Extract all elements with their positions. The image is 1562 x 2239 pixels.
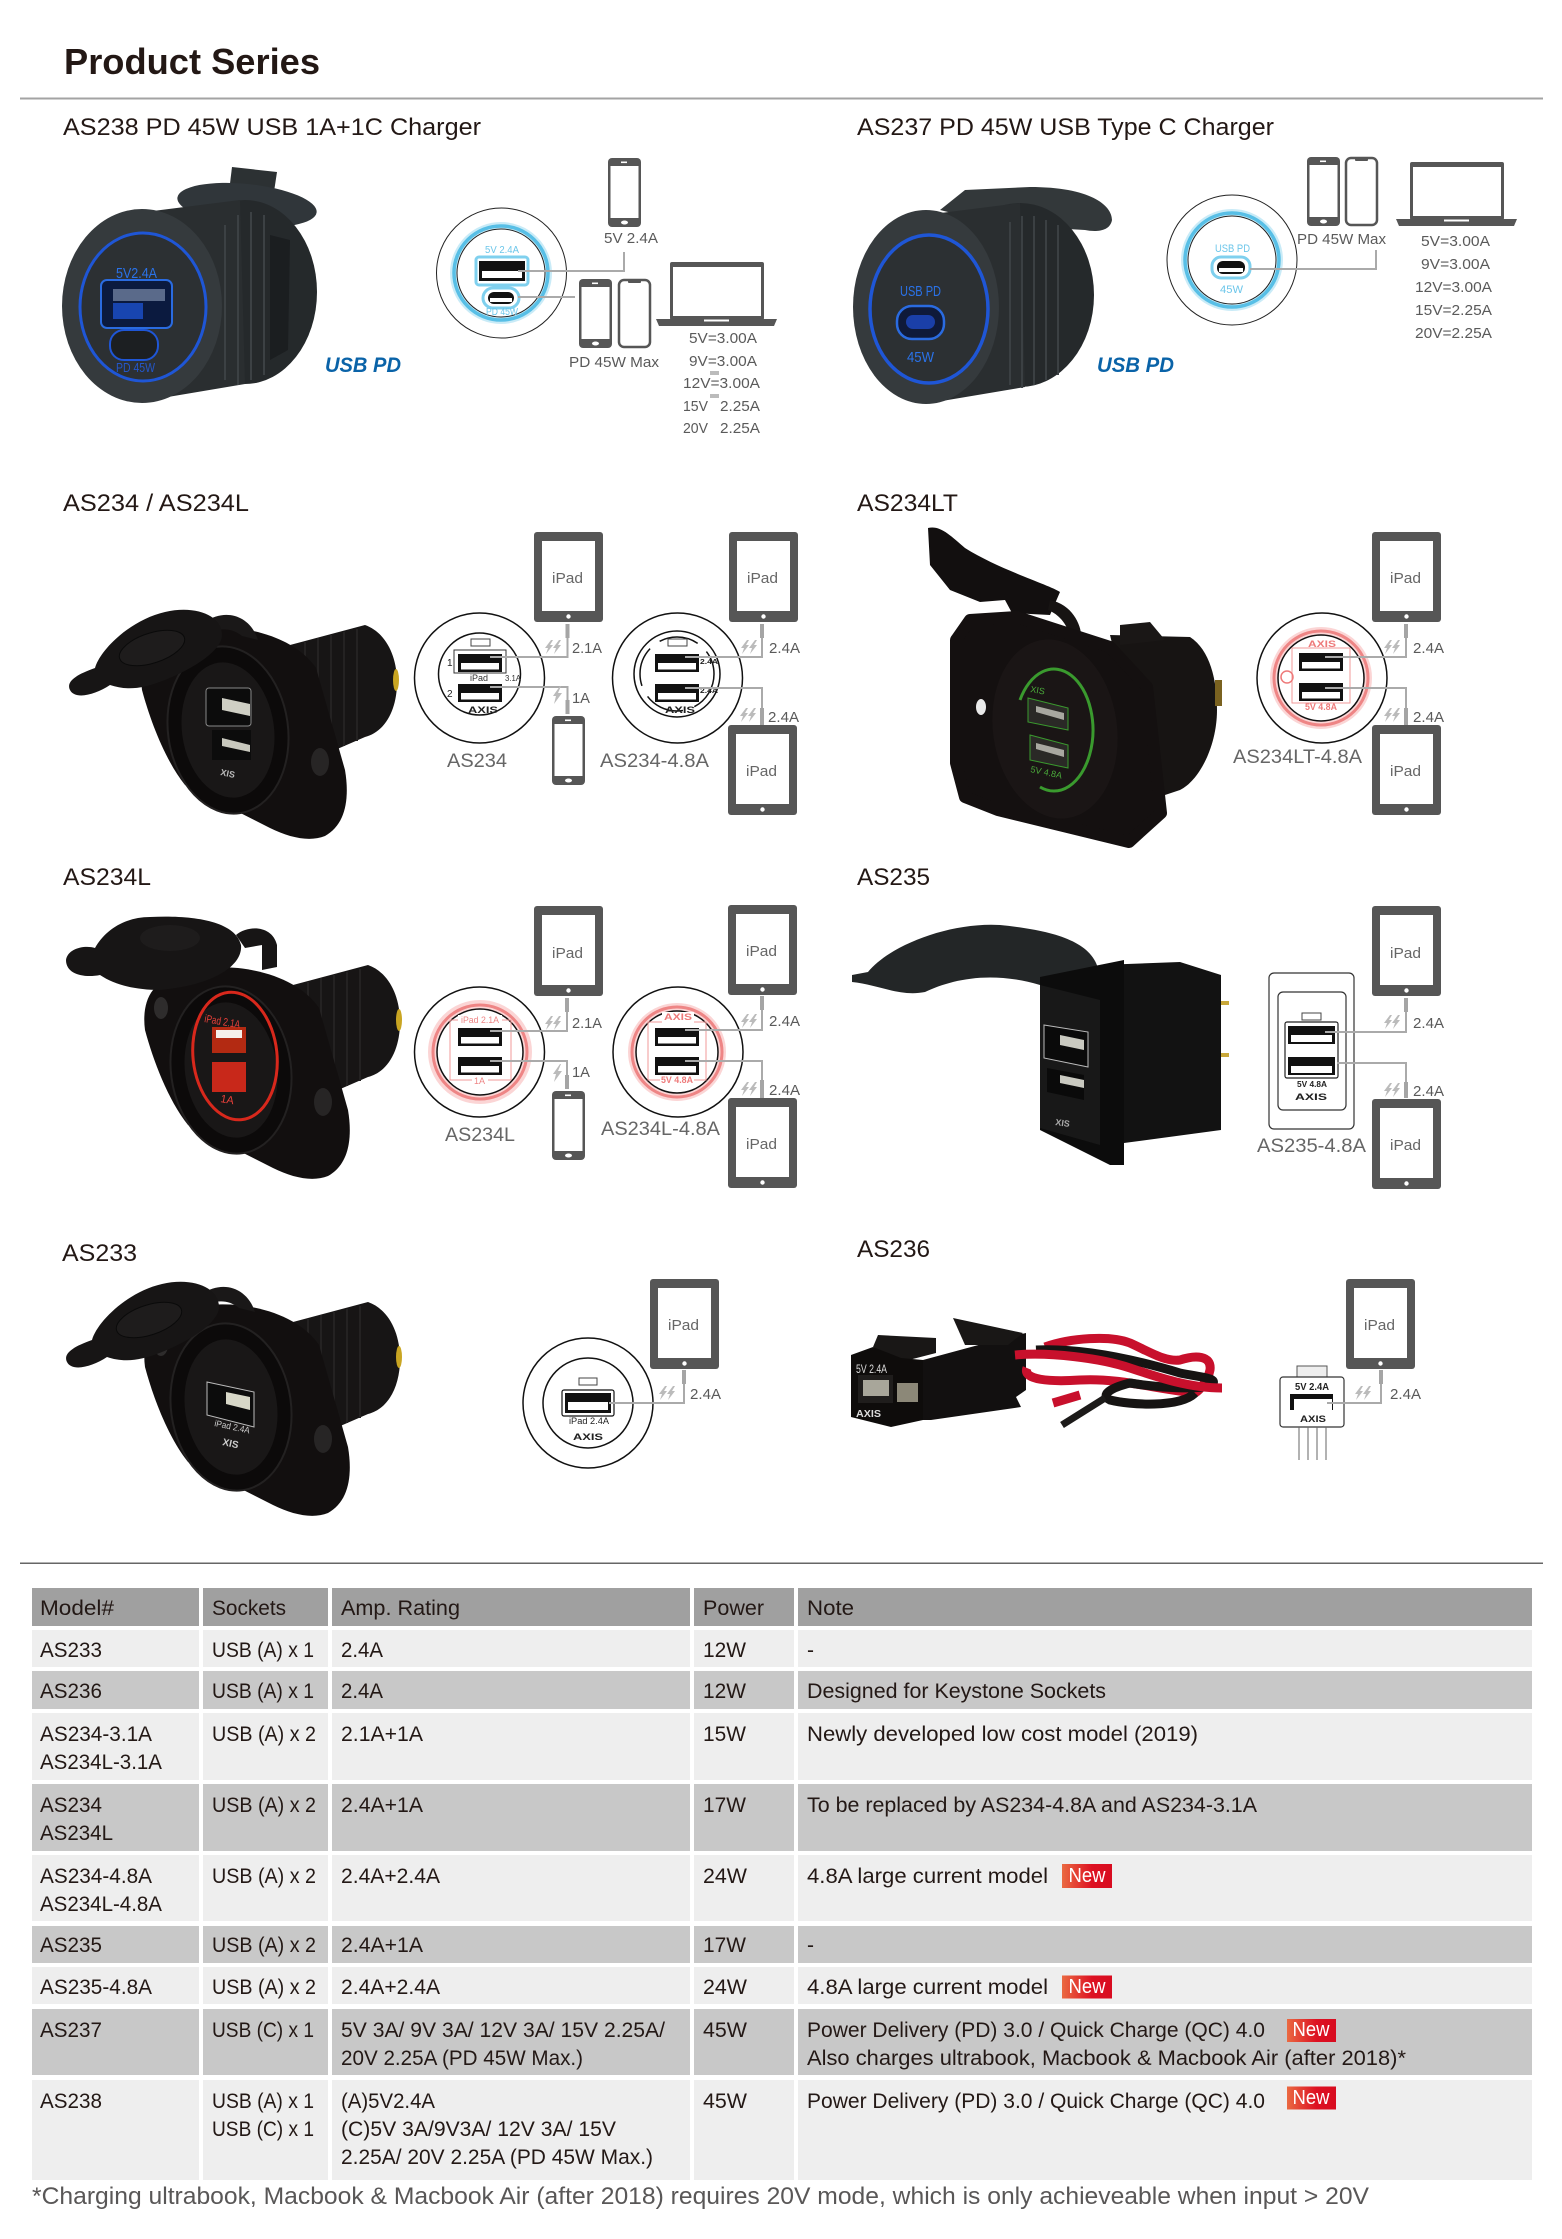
diagram: AS234 socket: 2	[447, 689, 453, 700]
table header	[32, 1588, 1532, 1626]
voltage list: 12V=3.00A	[683, 375, 760, 392]
label: 2.4A: 2.4A	[768, 709, 799, 726]
icon: iPad top	[1372, 906, 1441, 996]
photo: AS234L charger: iPad 2.1A	[203, 1013, 242, 1031]
row: AS236: Designed for Keystone Sockets	[807, 1680, 1106, 1703]
icon: iPad	[650, 1279, 719, 1369]
row: AS235: USB (A) x 2	[212, 1934, 316, 1957]
icon: iPad top	[728, 905, 797, 995]
specification table	[32, 1588, 1532, 2180]
label: iPad: iPad	[746, 943, 777, 960]
row: AS234: AS234	[40, 1794, 102, 1817]
row: AS235-4.8A	[32, 1967, 1532, 2004]
panel: AS236	[851, 1236, 1421, 1460]
row: AS236: AS236	[40, 1680, 102, 1703]
row: AS233: -	[807, 1639, 814, 1662]
diagram: AS236 module: AXIS	[1300, 1414, 1326, 1424]
panel: AS234L	[63, 864, 800, 1188]
icon: phone	[552, 716, 585, 785]
photo: AS238 charger	[62, 167, 319, 403]
row: AS234-3.1A: Newly developed low cost model (2019)	[807, 1723, 1198, 1746]
row: AS235: 17W	[703, 1934, 746, 1957]
icon: charge bolts	[659, 1386, 675, 1400]
label: 5V 2.4A: 5V 2.4A	[604, 230, 658, 247]
row: AS234-3.1A: 15W	[703, 1723, 746, 1746]
icon: laptop	[656, 262, 777, 326]
row: AS234: 17W	[703, 1794, 746, 1817]
row: AS236: 12W	[703, 1680, 746, 1703]
label: iPad: iPad	[746, 763, 777, 780]
row: AS237: Also charges ultrabook, Macbook & Macbook Air (after 2018)*	[807, 2047, 1406, 2070]
diagram: AS234 socket: 1	[447, 658, 453, 669]
diagram: AS234 socket: AXIS	[468, 705, 498, 715]
label: PD 45W Max: PD 45W Max	[1297, 231, 1386, 248]
label: iPad: iPad	[746, 1136, 777, 1153]
diagram: AS234L-4.8A socket: 5V 4.8A	[661, 1075, 693, 1085]
label: AS235-4.8A: AS235-4.8A	[1257, 1136, 1366, 1157]
photo: AS237 charger	[853, 187, 1112, 404]
row: AS233: AS233	[40, 1639, 102, 1662]
voltage list: 5V=3.00A	[689, 330, 757, 347]
diagram: AS236 module	[1280, 1366, 1381, 1460]
diagram: AS234L socket: iPad 2.1A	[461, 1015, 499, 1025]
label: AS234L: AS234L	[445, 1125, 515, 1146]
row: AS237	[32, 2009, 1532, 2075]
heading: AS234LT: AS234LT	[857, 490, 958, 517]
diagram: AS234L-4.8A socket: AXIS	[664, 1012, 692, 1022]
table header: Power	[703, 1597, 764, 1620]
row: AS234: USB (A) x 2	[212, 1794, 316, 1817]
row: AS233	[32, 1630, 1532, 1667]
row: AS234-3.1A: AS234-3.1A	[40, 1723, 152, 1746]
label: iPad: iPad	[1364, 1317, 1395, 1334]
label: iPad: iPad	[552, 570, 583, 587]
diagram: AS237 socket	[1167, 195, 1376, 325]
label: iPad: iPad	[668, 1317, 699, 1334]
badge: New: New	[1068, 1865, 1106, 1887]
photo: AS235 charger	[852, 925, 1229, 1165]
photo: AS234 charger	[69, 610, 399, 839]
voltage list	[1415, 233, 1492, 342]
diagram: AS235-4.8A socket: 5V 4.8A	[1297, 1080, 1327, 1089]
photo: AS236 charger	[851, 1318, 1222, 1427]
row: AS238: 2.25A/ 20V 2.25A (PD 45W Max.)	[341, 2146, 653, 2169]
panel: AS238	[62, 114, 777, 437]
diagram: AS233 socket: iPad 2.4A	[569, 1416, 609, 1426]
icon: charge bolts	[1384, 708, 1400, 722]
row: AS234-3.1A: 2.1A+1A	[341, 1723, 423, 1746]
row: AS234-4.8A: USB (A) x 2	[212, 1865, 316, 1888]
label: 2.1A: 2.1A	[572, 640, 602, 657]
row: AS234: AS234L	[40, 1822, 113, 1845]
diagram: AS234-4.8A socket: AXIS	[665, 705, 695, 715]
row: AS234-4.8A: 4.8A large current model	[807, 1865, 1048, 1888]
title: Product Series	[64, 41, 320, 82]
voltage list: 5V=3.00A	[1421, 233, 1490, 250]
icon: phone 5V	[608, 158, 641, 227]
diagram: AS234LT-4.8A socket	[1257, 613, 1406, 743]
icons: PD phones	[579, 279, 650, 348]
voltage list: 15V	[683, 398, 708, 415]
voltage list: 20V	[683, 420, 708, 437]
row: AS237: USB (C) x 1	[212, 2019, 314, 2042]
row: AS234-3.1A: AS234L-3.1A	[40, 1751, 162, 1774]
icon: charge bolts	[741, 1082, 757, 1096]
label: iPad: iPad	[1390, 1137, 1421, 1154]
icon: iPad bottom	[1372, 725, 1441, 815]
USB PD label: USB PD	[325, 354, 401, 377]
panel: AS233	[62, 1240, 721, 1516]
diagram: AS234-4.8A socket: 2.4A	[700, 688, 718, 695]
icon: iPad bottom	[1372, 1099, 1441, 1189]
diagram: AS238 socket: 5V 2.4A	[485, 245, 519, 256]
diagram: AS234LT-4.8A socket: AXIS	[1308, 639, 1336, 649]
label: AS234L-4.8A: AS234L-4.8A	[601, 1119, 720, 1140]
label: 2.4A: 2.4A	[769, 1013, 800, 1030]
photo: AS236 charger: AXIS	[856, 1409, 881, 1420]
icon: charge bolts	[1384, 640, 1400, 654]
row: AS237: 20V 2.25A (PD 45W Max.)	[341, 2047, 583, 2070]
voltage list: 2.25A	[720, 398, 760, 415]
row: AS238: (A)5V2.4A	[341, 2090, 435, 2113]
table header: Sockets	[212, 1597, 286, 1620]
label: 2.4A: 2.4A	[690, 1386, 721, 1403]
icon: charge bolts	[1384, 1083, 1400, 1097]
label: 1A: 1A	[572, 690, 590, 707]
row: AS237: 5V 3A/ 9V 3A/ 12V 3A/ 15V 2.25A/	[341, 2019, 665, 2042]
row: AS235-4.8A: USB (A) x 2	[212, 1976, 316, 1999]
table header: Model#	[40, 1597, 114, 1620]
label: iPad: iPad	[552, 945, 583, 962]
row: AS234-3.1A	[32, 1713, 1532, 1780]
label: iPad: iPad	[1390, 570, 1421, 587]
row: AS234-4.8A: 24W	[703, 1865, 747, 1888]
icon: charge bolts	[1355, 1386, 1371, 1400]
icon: iPad top	[729, 532, 798, 622]
row: AS238: 45W	[703, 2090, 747, 2113]
diagram: AS234L socket: 1A	[474, 1076, 485, 1086]
diagram: AS234-4.8A socket	[612, 613, 762, 743]
panel: AS235	[852, 864, 1444, 1189]
label: AS234LT-4.8A: AS234LT-4.8A	[1233, 747, 1362, 768]
diagram: AS234-4.8A socket: 2.4A	[700, 659, 718, 666]
badge: New: New	[1292, 2019, 1330, 2041]
photo: AS235 charger: XIS	[1055, 1117, 1070, 1129]
photo: AS238 charger: PD 45W	[116, 360, 156, 375]
heading: AS234 / AS234L: AS234 / AS234L	[63, 490, 249, 517]
icon: iPad top	[534, 906, 603, 996]
icon: charge bolts	[740, 708, 756, 722]
row: AS238	[32, 2080, 1532, 2180]
row: AS235-4.8A: 2.4A+2.4A	[341, 1976, 440, 1999]
label: 2.4A: 2.4A	[1413, 640, 1444, 657]
photo: AS234 charger: XIS	[220, 767, 236, 780]
icon: charge bolts	[741, 640, 757, 654]
heading: AS234L: AS234L	[63, 864, 151, 891]
icon: charge bolts	[1384, 1015, 1400, 1029]
row: AS236: USB (A) x 1	[212, 1680, 314, 1703]
diagram: AS234 socket: iPad	[470, 673, 488, 683]
label: 2.1A: 2.1A	[572, 1015, 602, 1032]
label: 2.4A: 2.4A	[1413, 709, 1444, 726]
icon: phone	[552, 1091, 585, 1160]
panel: AS234LT	[857, 490, 1444, 842]
voltage list: 15V=2.25A	[1415, 302, 1492, 319]
photo: AS237 charger: USB PD	[900, 283, 941, 300]
row: AS238: USB (C) x 1	[212, 2118, 314, 2141]
voltage list	[683, 330, 760, 437]
voltage list: 20V=2.25A	[1415, 325, 1492, 342]
row: AS234	[32, 1784, 1532, 1851]
row: AS237: 45W	[703, 2019, 747, 2042]
diagram: AS234L-4.8A socket	[613, 987, 762, 1117]
photo: AS234LT charger: XIS	[1030, 684, 1046, 696]
label: 2.4A: 2.4A	[769, 1082, 800, 1099]
row: AS235: 2.4A+1A	[341, 1934, 423, 1957]
table header: Note	[807, 1597, 854, 1620]
label: 1A: 1A	[572, 1064, 590, 1081]
diagram: AS238 socket	[436, 208, 624, 338]
photo: AS237 charger: 45W	[907, 349, 935, 366]
row: AS233: USB (A) x 1	[212, 1639, 314, 1662]
diagram: AS235-4.8A socket	[1269, 973, 1406, 1129]
row: AS234-4.8A	[32, 1855, 1532, 1921]
voltage list: 12V=3.00A	[1415, 279, 1492, 296]
row: AS234-4.8A: AS234L-4.8A	[40, 1893, 162, 1916]
icon: charge bolts	[741, 1014, 757, 1028]
diagram: AS233 socket: AXIS	[573, 1432, 603, 1442]
diagram: AS233 socket	[523, 1338, 684, 1468]
icons: PD phones	[1307, 157, 1377, 226]
footnote: *Charging ultrabook, Macbook & Macbook Air (after 2018) requires 20V mode, which is only achieveable when input > 20V	[32, 2183, 1369, 2210]
row: AS236: 2.4A	[341, 1680, 383, 1703]
row: AS233: 12W	[703, 1639, 746, 1662]
row: AS234-4.8A: 2.4A+2.4A	[341, 1865, 440, 1888]
label: AS234-4.8A: AS234-4.8A	[600, 751, 709, 772]
label: PD 45W Max: PD 45W Max	[569, 354, 660, 371]
photo: AS236 charger: 5V 2.4A	[856, 1362, 887, 1376]
diagram: AS238 socket: PD 45W	[486, 307, 518, 318]
badge: New: New	[1292, 2087, 1330, 2109]
heading: AS233: AS233	[62, 1240, 137, 1267]
label: 2.4A: 2.4A	[1413, 1015, 1444, 1032]
icon: iPad top	[534, 532, 603, 622]
icon: laptop	[1396, 162, 1517, 226]
badge: New: New	[1068, 1976, 1106, 1998]
label: iPad: iPad	[1390, 945, 1421, 962]
icon: iPad	[1346, 1279, 1415, 1369]
row: AS235-4.8A: 4.8A large current model	[807, 1976, 1048, 1999]
heading: AS238: AS238 PD 45W USB 1A+1C Charger	[63, 114, 481, 141]
label: 2.4A: 2.4A	[769, 640, 800, 657]
photo: AS233 charger: XIS	[221, 1437, 240, 1451]
diagram: AS235-4.8A socket: AXIS	[1295, 1092, 1327, 1102]
voltage list: 2.25A	[720, 420, 760, 437]
row: AS238: Power Delivery (PD) 3.0 / Quick Charge (QC) 4.0	[807, 2090, 1265, 2113]
row: AS235: AS235	[40, 1934, 102, 1957]
diagram: AS234L socket	[414, 987, 567, 1117]
row: AS234: 2.4A+1A	[341, 1794, 423, 1817]
heading: AS237: AS237 PD 45W USB Type C Charger	[857, 114, 1274, 141]
row: AS237: AS237	[40, 2019, 102, 2042]
icon: charge bolts	[545, 1016, 561, 1030]
icon: charge bolt	[553, 1064, 562, 1082]
row: AS233: 2.4A	[341, 1639, 383, 1662]
row: AS238: USB (A) x 1	[212, 2090, 314, 2113]
panel: AS234 / AS234L	[63, 490, 800, 839]
row: AS234: To be replaced by AS234-4.8A and AS234-3.1A	[807, 1794, 1257, 1817]
table header: Amp. Rating	[341, 1597, 460, 1620]
USB PD label: USB PD	[1097, 354, 1174, 377]
label: 2.4A: 2.4A	[1413, 1083, 1444, 1100]
row: AS235: -	[807, 1934, 814, 1957]
row: AS235-4.8A: 24W	[703, 1976, 747, 1999]
row: AS237: Power Delivery (PD) 3.0 / Quick Charge (QC) 4.0	[807, 2019, 1265, 2042]
photo: AS238 charger: 5V2.4A	[116, 265, 157, 282]
diagram: AS237 socket: 45W	[1220, 284, 1244, 296]
row: AS234-4.8A: AS234-4.8A	[40, 1865, 152, 1888]
row: AS235-4.8A: AS235-4.8A	[40, 1976, 152, 1999]
icon: charge bolts	[545, 640, 561, 654]
diagram: AS234 socket	[414, 613, 568, 743]
photo: AS233 charger	[66, 1282, 402, 1516]
row: AS236	[32, 1671, 1532, 1709]
icon: iPad top	[1372, 532, 1441, 622]
label: iPad: iPad	[1390, 763, 1421, 780]
heading: AS236: AS236	[857, 1236, 930, 1263]
row: AS234-3.1A: USB (A) x 2	[212, 1723, 316, 1746]
heading: AS235: AS235	[857, 864, 930, 891]
photo: AS234L charger	[66, 917, 402, 1179]
photo: AS234LT charger	[928, 527, 1222, 842]
panel: AS237	[853, 114, 1517, 404]
label: 2.4A: 2.4A	[1390, 1386, 1421, 1403]
icon: iPad bottom	[728, 725, 797, 815]
photo: AS234LT charger: 5V 4.8A	[1030, 764, 1063, 781]
photo: AS234L charger: 1A	[219, 1093, 235, 1107]
icon: iPad bottom	[728, 1098, 797, 1188]
diagram: AS237 socket: USB PD	[1215, 243, 1250, 255]
voltage list: 9V=3.00A	[1421, 256, 1490, 273]
label: AS234: AS234	[447, 751, 507, 772]
row: AS238: (C)5V 3A/9V3A/ 12V 3A/ 15V	[341, 2118, 616, 2141]
diagram: AS234LT-4.8A socket: 5V 4.8A	[1305, 702, 1337, 712]
row: AS235	[32, 1926, 1532, 1963]
diagram: AS234 socket: 3.1A	[505, 674, 522, 683]
icon: charge bolt	[553, 686, 562, 704]
label: iPad: iPad	[747, 570, 778, 587]
diagram: AS236 module: 5V 2.4A	[1295, 1382, 1329, 1393]
photo: AS233 charger: iPad 2.4A	[214, 1418, 251, 1435]
voltage list: 9V=3.00A	[689, 353, 757, 370]
row: AS238: AS238	[40, 2090, 102, 2113]
